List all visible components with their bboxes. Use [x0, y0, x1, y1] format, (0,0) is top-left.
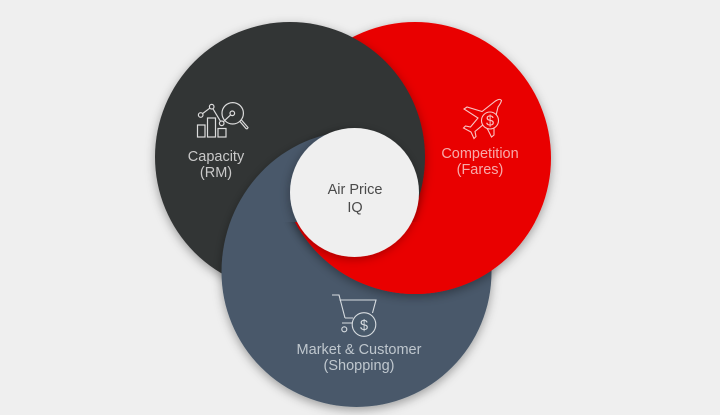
center label: Air Price: [328, 182, 382, 198]
icon: plane with dollar: $: [486, 114, 494, 130]
market and customer label: (Shopping): [324, 358, 394, 374]
icon: capacity chart and magnifier: [198, 103, 248, 137]
circle: capacity: [155, 22, 425, 292]
center label: IQ: [347, 200, 363, 216]
icon: shopping cart with dollar: $: [360, 318, 368, 334]
competition label: (Fares): [457, 162, 503, 178]
venn diagram infographic: [149, 19, 557, 415]
capacity label: Capacity: [188, 149, 245, 165]
competition overlap over market circle: [295, 222, 535, 294]
circle: competition: [279, 22, 551, 294]
icon: plane with dollar: [464, 99, 502, 138]
capacity label: (RM): [200, 165, 232, 181]
center circle: [290, 128, 419, 257]
competition label: Competition: [441, 146, 519, 162]
icon: shopping cart with dollar: [332, 295, 376, 336]
circle: market and customer: [222, 131, 492, 407]
market and customer label: Market & Customer: [297, 342, 422, 358]
competition shadow on market circle: [290, 222, 492, 300]
